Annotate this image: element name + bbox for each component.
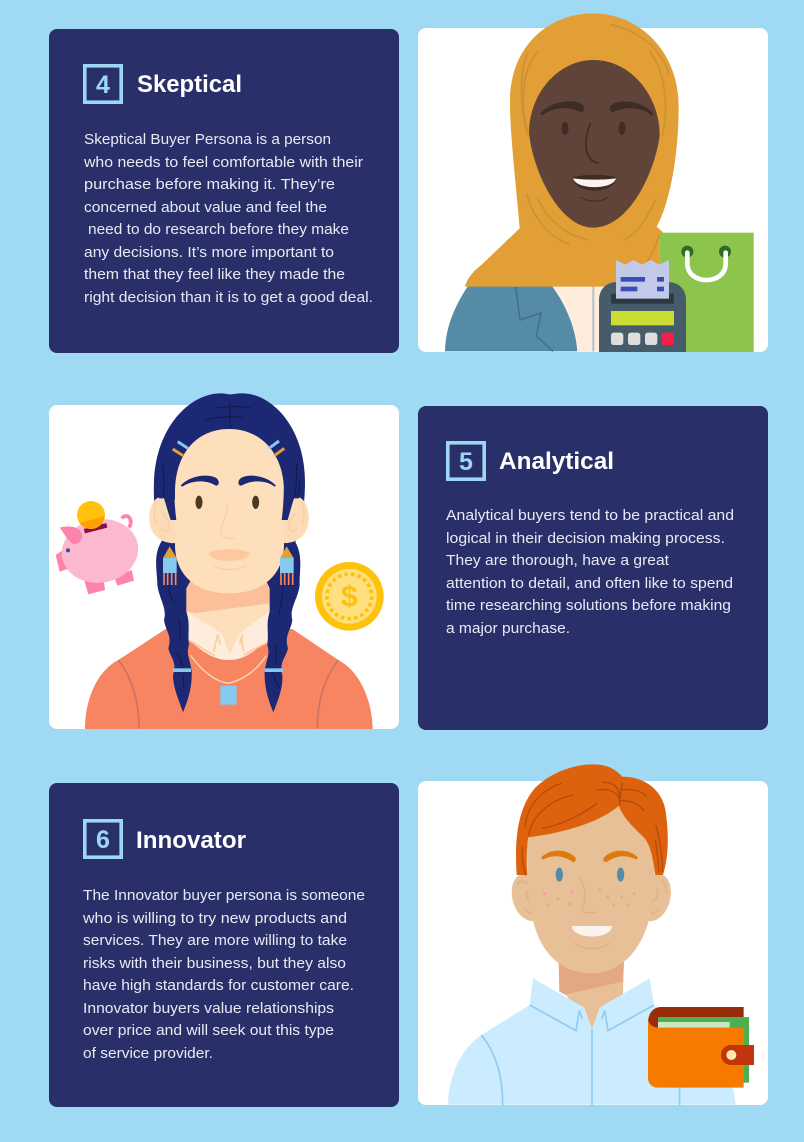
- body text: skeptical: who needs to feel comfortable with their: [83, 155, 363, 171]
- body text: innovator: The Innovator buyer persona is someone: [83, 888, 365, 904]
- figure: braids: [156, 540, 300, 712]
- panel: analytical text: [418, 406, 768, 730]
- number badge 6: [85, 821, 121, 857]
- body text: innovator: over price and will seek out this type: [83, 1023, 334, 1039]
- figure: analytical face: [158, 429, 300, 593]
- panel: innovator illustration: [418, 764, 768, 1105]
- body text: skeptical: need to do research before they make: [88, 222, 349, 238]
- body text: skeptical: any decisions. It’s more important to: [84, 245, 334, 261]
- body text: skeptical: right decision than it is to get a good deal.: [84, 290, 373, 306]
- figure: man red hair: [516, 764, 668, 875]
- icon: card payment terminal: [599, 260, 686, 352]
- heading: Innovator: Innovator: [136, 827, 246, 854]
- body text: innovator: [82, 888, 365, 1062]
- body text: innovator: Innovator buyers value relationships: [83, 1001, 334, 1017]
- icon: gold dollar coin: [315, 562, 384, 631]
- number badge 4: 4: [96, 71, 110, 99]
- figure: neck and collar: [186, 582, 270, 660]
- figure: man shirt: [448, 1005, 736, 1105]
- figure: earrings: [163, 546, 294, 585]
- figure: ears: [149, 497, 309, 543]
- body text: skeptical: them that they feel like they made the: [84, 267, 345, 283]
- figure: hair part and hair clips: [163, 402, 300, 497]
- body text: analytical: logical in their decision making process.: [446, 531, 725, 547]
- figure: woman blazer and blouse: [445, 286, 659, 352]
- body text: innovator: have high standards for customer care.: [83, 978, 354, 994]
- figure: man face: [527, 800, 655, 973]
- panel: innovator text: [49, 783, 399, 1107]
- figure: woman face: [529, 60, 660, 228]
- body text: analytical: [446, 508, 734, 637]
- figure: necklace: [190, 655, 266, 705]
- body text: analytical: attention to detail, and often like to spend: [446, 576, 733, 592]
- body text: skeptical: purchase before making it. They’re: [84, 177, 335, 193]
- panel: analytical illustration: [49, 393, 399, 729]
- figure: hair top: [154, 393, 305, 545]
- body text: analytical: a major purchase.: [446, 621, 570, 637]
- number badge 5: [448, 443, 484, 479]
- body text: analytical: They are thorough, have a great: [446, 553, 669, 569]
- number badge 5: 5: [459, 448, 473, 476]
- body text: analytical: Analytical buyers tend to be practical and: [446, 508, 734, 524]
- panel: skeptical illustration: [418, 13, 768, 352]
- icon: shopping bag: [659, 233, 754, 352]
- body text: innovator: who is willing to try new products and: [82, 911, 347, 927]
- number badge 6: 6: [96, 826, 110, 854]
- body text: analytical: time researching solutions before making: [446, 598, 731, 614]
- figure: man collar: [530, 978, 654, 1031]
- figure: man ears: [512, 874, 671, 921]
- body text: innovator: of service provider.: [83, 1046, 213, 1062]
- body text: innovator: services. They are more willing to take: [83, 933, 347, 949]
- icon: orange wallet: [648, 1007, 754, 1088]
- body text: skeptical: Skeptical Buyer Persona is a person: [84, 132, 331, 148]
- figure: woman hijab: [465, 13, 679, 287]
- figure: analytical person sweater: [85, 629, 373, 729]
- panel: skeptical text: [49, 29, 399, 353]
- heading: Skeptical: Skeptical: [137, 71, 242, 98]
- icon: piggy bank: [56, 501, 143, 594]
- figure: man neck: [559, 960, 624, 1028]
- body text: skeptical: [83, 132, 373, 306]
- icon: gold dollar coin: $: [341, 581, 358, 614]
- body text: skeptical: concerned about value and feel the: [84, 200, 327, 216]
- body text: innovator: risks with their business, but they also: [83, 956, 346, 972]
- heading: Analytical: Analytical: [499, 448, 614, 475]
- number badge 4: [85, 66, 121, 102]
